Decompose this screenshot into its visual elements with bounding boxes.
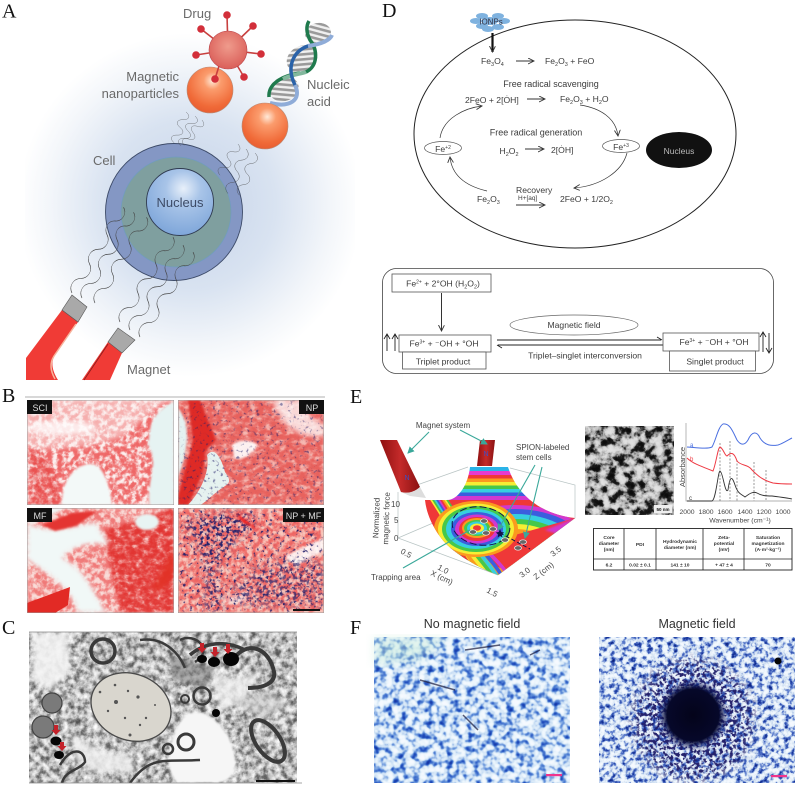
cell outline (414, 20, 736, 248)
trapping area dashed ring (450, 503, 512, 549)
equations in cell: 3 (497, 200, 500, 206)
label: NP + MF (283, 508, 324, 522)
singlet state box (663, 333, 759, 371)
equations in cell: Free radical scavenging (503, 79, 599, 89)
label: Drug: Drug (183, 6, 211, 21)
down arrow (440, 293, 442, 331)
panel letter E: E (350, 386, 362, 408)
TEM image (29, 632, 297, 783)
y axis label: magnetic force (381, 491, 392, 545)
panel A: magnetic nanoparticle targeting diagram (2, 0, 355, 380)
surface axis ticks: X (cm) (429, 569, 455, 587)
FTIR absorbance chart: Absorbance (678, 447, 687, 487)
equations in cell: 2 (610, 200, 613, 206)
panel B: histology micrographs (2, 385, 325, 613)
magnetic field ellipse (510, 315, 638, 335)
micrograph: magnetic field (599, 637, 795, 783)
properties table: (nm) (604, 547, 615, 553)
equations in cell: Fe (481, 56, 491, 66)
panel D: iron redox mechanism in cell (382, 0, 774, 374)
properties table: Saturation (756, 536, 780, 541)
TEM of nanoparticles: 50 nm (656, 507, 670, 512)
FTIR absorbance chart (678, 423, 792, 524)
properties table: magnetization (752, 541, 784, 547)
label: Nucleic acid: acid (307, 94, 331, 109)
left magnet (26, 295, 87, 380)
singlet state box: + ⁻OH + °OH (695, 337, 749, 347)
micrograph: no magnetic field (374, 637, 570, 783)
equations in cell: 3 (491, 62, 494, 68)
label: NP: NP (306, 403, 318, 413)
starting reactant box: 2 (474, 284, 477, 290)
equations in cell: 2 (599, 100, 602, 106)
FTIR absorbance chart: Wavenumber (cm⁻¹) (709, 518, 771, 524)
properties table: 141 ± 10 (670, 562, 690, 568)
equations in cell: O (573, 94, 580, 104)
heading: No magnetic field: No magnetic field (424, 617, 520, 631)
equations in cell: O (509, 146, 516, 156)
IONPs cloud (470, 13, 510, 32)
properties table: 70 (765, 562, 771, 568)
magnetic nanoparticle 2 (242, 103, 288, 149)
equations in cell: O (602, 94, 609, 104)
panel letter C: C (2, 617, 15, 639)
triplet spin arrows (384, 334, 398, 351)
triplet state box: Fe (409, 338, 419, 348)
panel letter B: B (2, 385, 15, 407)
triplet-singlet schematic box (382, 268, 774, 374)
singlet spin arrows (760, 332, 772, 353)
hot spot rings (440, 505, 575, 575)
FTIR absorbance chart: 1400 (737, 509, 753, 516)
equations in cell: Free radical generation (490, 128, 582, 138)
right magnet (82, 328, 135, 380)
singlet state box: Singlet product (686, 356, 744, 366)
FTIR absorbance chart: 1800 (698, 509, 714, 516)
micrograph NP + MF (178, 508, 324, 613)
surface axis ticks: Z (cm) (532, 560, 556, 582)
equations in cell: 3 (565, 62, 568, 68)
3D magnetic force surface (398, 466, 576, 576)
FTIR absorbance chart: a (690, 443, 694, 449)
label: Trapping area: Trapping area (371, 573, 421, 582)
label: NP (299, 400, 324, 414)
singlet state box: 3+ (689, 338, 695, 344)
Fe+3 node (602, 140, 640, 152)
panel letter A: A (2, 0, 17, 22)
singlet state box: Fe (679, 337, 689, 347)
starting reactant box: O (467, 278, 474, 288)
labeled cells (470, 519, 526, 550)
trapping area rings (434, 501, 518, 557)
magnet cylinder right: N (483, 451, 489, 458)
equations in cell: 4 (501, 62, 504, 68)
panel letter D: D (382, 0, 396, 22)
equations in cell: + H (583, 94, 599, 104)
surface axis ticks: 3.0 (518, 565, 532, 580)
equations in cell: 2[ȮH] (551, 145, 573, 155)
FTIR absorbance chart: b (690, 457, 694, 463)
equations in cell: Fe (477, 194, 487, 204)
heading: Magnetic field: Magnetic field (658, 617, 736, 631)
label: Cell: Cell (93, 153, 116, 168)
properties table: Zeta- (718, 536, 730, 541)
reaction arrows (440, 61, 627, 205)
teal pointers (403, 430, 542, 568)
magnet cylinder left: N (404, 475, 410, 482)
surface axis ticks: 1.5 (485, 586, 500, 599)
Fe+2 node: +2 (445, 145, 451, 151)
properties table: diameter (nm) (664, 545, 697, 551)
label: Magnetic nanoparticles: Magnetic (126, 69, 179, 84)
surface axis ticks (391, 500, 563, 599)
equations in cell: O (494, 56, 501, 66)
label: NP + MF: NP + MF (286, 511, 322, 521)
starting reactant box: 2+ (416, 280, 422, 286)
left tight bands (430, 500, 452, 515)
equations in cell: 3 (580, 100, 583, 106)
label: SPION-labeled stem cells: stem cells (516, 453, 552, 462)
properties table: (mV) (719, 547, 730, 553)
TEM of nanoparticles (585, 426, 674, 515)
equations in cell: Recovery (516, 185, 553, 195)
nucleic acid helix (266, 21, 333, 105)
equations in cell: O (558, 56, 565, 66)
equations in cell: Fe (545, 56, 555, 66)
label: Magnet: Magnet (127, 362, 171, 377)
surface axis ticks: 10 (391, 500, 400, 509)
triplet state box (399, 335, 491, 369)
equations in cell (465, 56, 613, 206)
properties table (593, 528, 792, 570)
FTIR absorbance chart: c (689, 496, 692, 502)
magnetic field ellipse: Magnetic field (547, 320, 601, 330)
IONPs cloud: IONPs (479, 18, 503, 26)
interconversion label: Triplet–singlet interconversion (528, 350, 642, 360)
equations in cell: 2 (487, 200, 490, 206)
bottom bands (460, 554, 506, 575)
panel letter F: F (350, 617, 361, 639)
equations in cell: O (490, 194, 497, 204)
equations in cell: H+[aq] (518, 195, 538, 202)
panel E: magnet system and particle characterization (350, 386, 792, 601)
starting reactant box: Fe (406, 278, 416, 288)
properties table: potential (714, 541, 735, 547)
properties table: Core (603, 536, 615, 541)
Fe+2 node: Fe (435, 144, 445, 154)
label: SCI (27, 400, 52, 414)
label: SPION-labeled stem cells: SPION-labeled (516, 443, 569, 452)
properties table: (A·m²·kg⁻¹) (755, 547, 781, 553)
FTIR absorbance chart: 1200 (756, 509, 772, 516)
equations in cell: 2FeO + 2[ȮH] (465, 95, 519, 105)
properties table: PDI (636, 542, 645, 548)
equations in cell: + FeO (568, 56, 595, 66)
starting reactant box (392, 274, 491, 292)
equations in cell: 2FeO + 1/2O (560, 194, 610, 204)
triplet state box: 3+ (419, 340, 425, 346)
nucleus (646, 132, 712, 168)
Fe+3 node: +3 (623, 143, 629, 149)
drug molecule (192, 11, 265, 81)
magnet cylinder left (380, 440, 426, 498)
properties table: + 47 ± 4 (715, 562, 733, 568)
wavy field lines (68, 110, 259, 340)
properties table: 0.02 ± 0.1 (629, 562, 651, 568)
magnet cylinder right (477, 440, 495, 466)
surface axis ticks: 3.5 (549, 544, 563, 559)
Fe+3 node: Fe (613, 142, 623, 152)
label: Nucleus: Nucleus (157, 195, 204, 210)
panel C: electron micrograph (2, 617, 302, 783)
nucleus: Nucleus (664, 146, 694, 156)
properties table: Hydrodynamic (663, 540, 697, 545)
label: Nucleic acid: Nucleic (307, 77, 350, 92)
magnetic nanoparticle 1 (187, 66, 233, 113)
micrograph MF (27, 508, 174, 613)
panel F: cell staining micrographs (350, 617, 795, 783)
top stripes (425, 467, 575, 569)
FTIR absorbance chart: 1600 (717, 509, 733, 516)
starting reactant box: ) (477, 278, 480, 288)
y axis label: Normalized (371, 498, 382, 538)
label: Magnetic nanoparticles: nanoparticles (102, 86, 179, 101)
label: MF: MF (34, 511, 47, 521)
equations in cell: H (500, 146, 506, 156)
triplet state box: Triplet product (416, 356, 471, 366)
starting reactant box: 2 (464, 284, 467, 290)
equations in cell: Fe (560, 94, 570, 104)
Fe+2 node (424, 142, 462, 154)
equations in cell: 2 (555, 62, 558, 68)
triplet state box: + ⁻OH + °OH (425, 338, 479, 348)
properties table: diameter (599, 541, 619, 547)
label: Magnet system: Magnet system (416, 421, 470, 430)
label: MF (27, 508, 52, 522)
surface axis ticks: 0 (394, 534, 399, 543)
label: SCI: SCI (32, 403, 48, 413)
micrograph SCI (27, 400, 174, 505)
properties table: 6.2 (606, 562, 613, 568)
micrograph NP (178, 400, 324, 505)
equations in cell: 2 (506, 152, 509, 158)
scale bar (293, 609, 320, 611)
starting reactant box: + 2°OH (H (422, 278, 464, 288)
surface axis ticks: 0.5 (399, 547, 414, 560)
surface axis ticks: 1.0 (436, 563, 451, 576)
equations in cell: 2 (570, 100, 573, 106)
thick entry arrow (491, 33, 494, 52)
cell with cytoplasm and nucleus (106, 144, 242, 280)
surface axis ticks: 5 (394, 516, 399, 525)
interconversion arrows (497, 337, 663, 348)
FTIR absorbance chart: 1000 (775, 509, 791, 516)
equations in cell: 2 (515, 152, 519, 158)
FTIR absorbance chart: 2000 (679, 509, 695, 516)
